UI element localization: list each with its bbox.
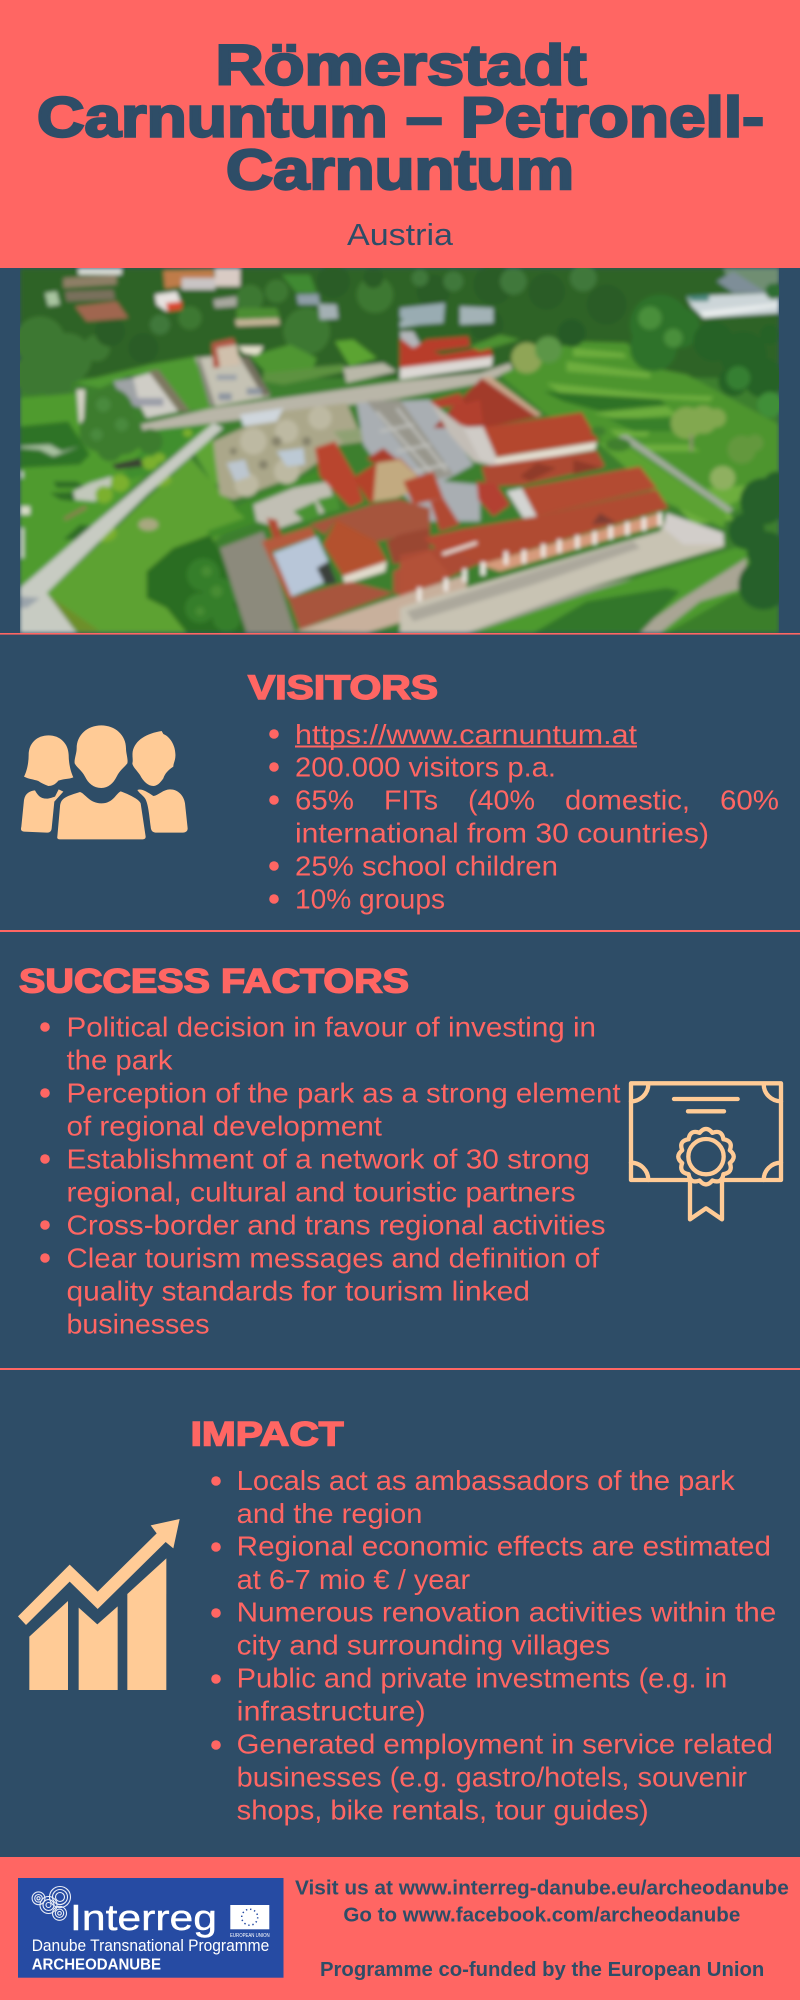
logo: Interreg Danube Transnational Programme: Danube Transnational Programme [32, 1936, 269, 1955]
top-left wing roofs [315, 441, 363, 507]
far tree belt [20, 268, 779, 378]
colonnade [480, 513, 663, 571]
impact list: city and surrounding villages [237, 1630, 610, 1661]
impact list: Generated employment in service related [237, 1729, 773, 1760]
excavation ruins [77, 390, 85, 423]
footer links and funding note: Go to www.facebook.com/archeodanube [343, 1905, 740, 1927]
logo: Interreg Danube Transnational Programme [18, 1878, 284, 1978]
heading: success factors: SUCCESS FACTORS [19, 962, 409, 1000]
icon: Interreg concentric circles [32, 1886, 70, 1920]
title: Carnuntum [226, 138, 574, 202]
tree by the road [511, 343, 542, 373]
footer links and funding note [295, 1877, 789, 1981]
heading: visitors: VISITORS [248, 669, 438, 707]
rubble ruins [213, 403, 363, 500]
visitors list: domestic, [565, 785, 690, 816]
success factors list: Perception of the park as a strong element [66, 1078, 621, 1109]
header banner [0, 0, 800, 268]
impact list [211, 1465, 776, 1826]
success factors list: of regional development [66, 1111, 382, 1142]
main lawn [47, 458, 247, 633]
impact list: Public and private investments (e.g. in [237, 1663, 727, 1694]
lawn on right [500, 341, 779, 511]
lower lawn [470, 545, 753, 633]
icon: EU flag [230, 1905, 269, 1929]
impact list: businesses (e.g. gastro/hotels, souvenir [237, 1762, 747, 1793]
footer links and funding note: Visit us at www.interreg-danube.eu/archeodanube [295, 1877, 789, 1899]
visitors list: 60% [720, 785, 779, 816]
success factors list: Political decision in favour of investing in [66, 1012, 596, 1043]
aerial photo of the Carnuntum site [13, 265, 790, 633]
icon: group of people [21, 725, 188, 839]
visitors list: 200.000 visitors p.a. [295, 752, 556, 783]
heading: impact: IMPACT [191, 1416, 344, 1454]
big trees upper right [630, 295, 700, 371]
visitors list: 25% school children [295, 851, 558, 882]
white hall far right [687, 293, 779, 318]
success factors list: Establishment of a network of 30 strong [66, 1144, 590, 1175]
title [37, 34, 764, 202]
grey excavation field [357, 400, 480, 521]
title: Römerstadt [216, 34, 587, 98]
upper-left lawn [20, 393, 213, 588]
left building group [253, 481, 337, 528]
success factors list: Clear tourism messages and definition of [66, 1243, 599, 1274]
walkway [20, 423, 223, 633]
success factors list [40, 1012, 621, 1340]
photo bottom rule [0, 633, 800, 635]
logo: Interreg Danube Transnational Programme: Interreg [70, 1897, 217, 1938]
icon: rising bar chart with arrow [18, 1519, 180, 1690]
subtitle: country: Austria [347, 217, 454, 252]
tree at bottom of lawn [185, 558, 241, 632]
logo: Interreg Danube Transnational Programme: ARCHEODANUBE [32, 1956, 161, 1973]
panel: visitors [21, 669, 779, 915]
road [140, 363, 513, 431]
visitors list [269, 719, 779, 915]
tree, middle-left [79, 388, 163, 461]
gravel edge on right [663, 513, 723, 545]
visitors list: (40% [468, 785, 535, 816]
grass behind excavations [75, 356, 213, 411]
footer links and funding note: Programme co-funded by the European Union [320, 1959, 764, 1981]
footer band [0, 1857, 800, 2000]
free-standing trees on lawn [671, 406, 726, 439]
main red roofs [433, 378, 540, 428]
logo: Interreg Danube Transnational Programme: EUROPEAN UNION [230, 1933, 270, 1939]
gravel forecourt [400, 515, 724, 633]
impact list: and the region [237, 1498, 422, 1529]
panel: success factors [19, 962, 781, 1340]
shrubs [91, 429, 192, 542]
middle lawn right of road [125, 426, 202, 478]
visitors list: FITs [384, 785, 438, 816]
impact list: Numerous renovation activities within the [237, 1597, 776, 1628]
hedge [54, 601, 96, 633]
visitors list: 65% [295, 785, 354, 816]
impact list: at 6-7 mio € / year [237, 1564, 470, 1595]
visitors list: https://www.carnuntum.at [295, 719, 637, 750]
visitors list: international from 30 countries) [295, 818, 709, 849]
impact list: infrastructure) [237, 1696, 426, 1727]
rear building complex [396, 328, 424, 351]
shadow across forecourt [407, 541, 640, 621]
visitors list: 10% groups [295, 884, 445, 915]
panel: impact [18, 1416, 776, 1826]
success factors list: regional, cultural and touristic partners [66, 1177, 576, 1208]
impact list: Locals act as ambassadors of the park [237, 1465, 736, 1496]
icon: certificate [631, 1083, 781, 1219]
success factors list: businesses [66, 1309, 210, 1340]
path at right [618, 435, 733, 513]
title: Carnuntum – Petronell- [37, 86, 764, 150]
impact list: shops, bike rentals, tour guides) [237, 1795, 649, 1826]
success factors list: quality standards for tourism linked [66, 1276, 530, 1307]
impact list: Regional economic effects are estimated [237, 1531, 771, 1562]
houses [63, 275, 117, 288]
dark trees lower right [728, 470, 779, 610]
success factors list: the park [66, 1045, 174, 1076]
success factors list: Cross-border and trans regional activities [66, 1210, 606, 1241]
